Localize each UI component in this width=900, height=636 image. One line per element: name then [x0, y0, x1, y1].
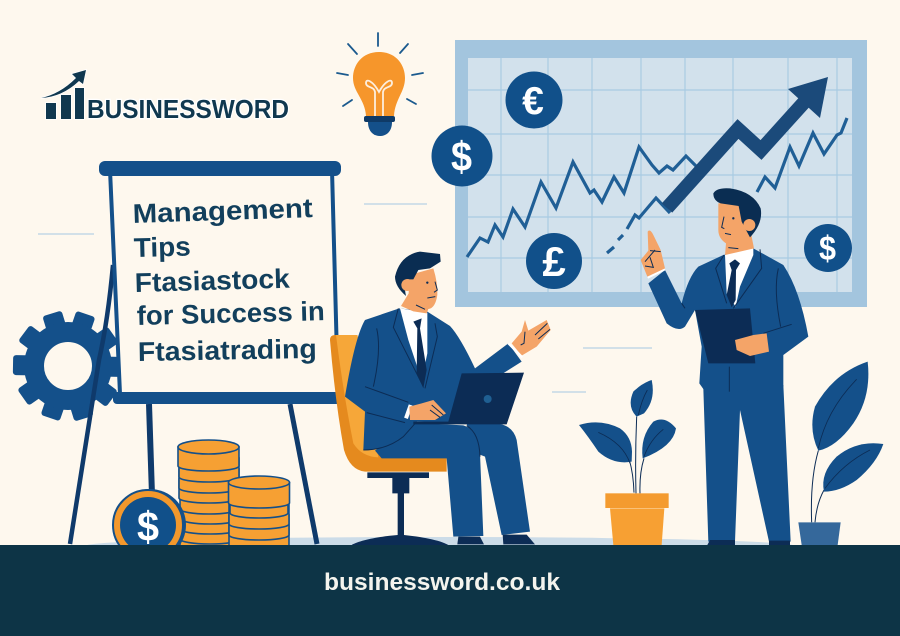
coin stacks [178, 440, 290, 554]
logo icon: bars and arrow [41, 70, 86, 119]
blue pot [798, 522, 841, 545]
icon: dollar coin large: $ [451, 133, 472, 180]
tall plant leaves and stems [811, 362, 883, 522]
footer band [0, 545, 900, 636]
seated man laptop [413, 373, 524, 424]
seated businessman with chair and laptop [330, 252, 551, 545]
panel: chart board [455, 40, 867, 307]
seated man jacket [345, 308, 522, 457]
standing man jacket [648, 246, 808, 392]
coin stack: short [228, 476, 290, 551]
icon: dollar medallion: $ [137, 503, 159, 550]
icon: euro coin [506, 72, 562, 128]
plant in blue pot [798, 362, 883, 545]
flipchart easel [70, 161, 345, 544]
standing man head [713, 188, 761, 255]
arrow: big rising trend [667, 77, 828, 208]
title [132, 193, 325, 367]
standing man holding hand [735, 333, 769, 356]
title: Ftasiatrading [138, 334, 317, 367]
seated man hand lines [521, 323, 550, 345]
icon: gear [13, 310, 123, 422]
plant in orange pot [579, 380, 676, 545]
title: for Success in [136, 296, 325, 331]
easel bottom bar [113, 392, 345, 404]
icon: dollar coin large [432, 126, 492, 186]
office chair [330, 335, 448, 545]
title: Ftasiastock [134, 264, 291, 298]
title: Management [132, 193, 313, 229]
seated man raised hand [512, 320, 551, 356]
icon: pound coin [526, 233, 582, 289]
coin stack: tall [178, 440, 240, 554]
icon: dollar coin small: $ [819, 230, 836, 268]
icon: pound coin: £ [542, 238, 566, 285]
title: Tips [133, 232, 191, 263]
seated man trousers [375, 423, 535, 544]
icon: dollar medallion [113, 489, 186, 561]
seated man head [395, 252, 441, 313]
logo: Businessword [41, 70, 289, 124]
standing man trousers and shoes [703, 385, 791, 545]
icon: light bulb [337, 33, 423, 136]
standing businessman [641, 188, 808, 545]
chart line: right trend [757, 118, 847, 192]
footer website: businessword.co.uk [324, 569, 561, 596]
icon: dollar coin small [804, 224, 852, 272]
icon: euro coin: € [522, 80, 544, 123]
chart line: left trend [467, 147, 697, 257]
easel paper [110, 170, 338, 394]
easel legs [70, 265, 317, 544]
easel top bar [99, 161, 341, 176]
orange pot [605, 493, 669, 545]
logo wordmark: BUSINESSWORD [87, 94, 289, 124]
standing man pointing hand [641, 231, 665, 277]
seated man typing hand [406, 400, 446, 420]
plant leaves and stems [579, 380, 676, 493]
clipboard [695, 308, 755, 363]
chart line: dashed lead-in [607, 198, 670, 253]
